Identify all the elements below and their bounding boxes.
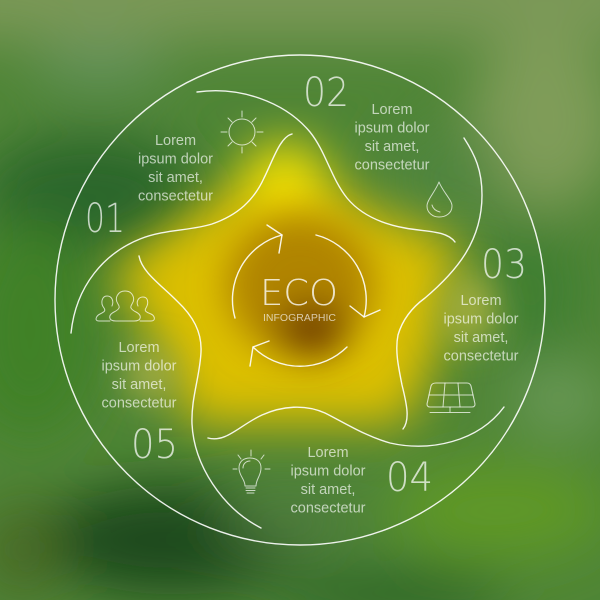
number 05: 05 xyxy=(131,422,178,468)
text block 2: ipsum dolor xyxy=(355,120,430,136)
text block 4: sit amet, xyxy=(301,482,355,498)
text block 3: sit amet, xyxy=(454,330,508,346)
text block 2: Lorem xyxy=(371,102,413,118)
title: ECO: ECO xyxy=(260,273,338,314)
text block 3: ipsum dolor xyxy=(444,312,519,328)
icon: solar panel xyxy=(427,383,475,412)
text block 4: Lorem xyxy=(307,445,349,461)
petal curve 4 xyxy=(208,407,504,446)
central cycle arrows xyxy=(232,225,380,366)
text block 4: ipsum dolor xyxy=(291,464,366,480)
text block 1: sit amet, xyxy=(148,170,203,186)
text block 2: consectetur xyxy=(355,158,430,174)
number 02: 02 xyxy=(303,70,349,116)
icon: light bulb xyxy=(233,450,270,493)
subtitle: INFOGRAPHIC: INFOGRAPHIC xyxy=(263,312,336,324)
petal curve 1 xyxy=(197,91,455,242)
text block 3: consectetur xyxy=(444,348,519,364)
petal curve 3 xyxy=(139,256,261,528)
petal curve 5 xyxy=(397,138,482,429)
text block 5: Lorem xyxy=(118,340,160,356)
text block 5: consectetur xyxy=(102,396,177,412)
text block 1: consectetur xyxy=(138,188,213,204)
icon: people xyxy=(96,291,154,321)
icon: water drop xyxy=(427,182,452,217)
text block 1: Lorem xyxy=(155,133,196,149)
text block 5: ipsum dolor xyxy=(102,358,177,374)
text block 3: Lorem xyxy=(460,293,502,309)
text block 2: sit amet, xyxy=(365,139,419,155)
number 01: 01 xyxy=(85,196,125,242)
text block 4: consectetur xyxy=(291,500,366,516)
text block 1: ipsum dolor xyxy=(138,152,213,168)
outer circle xyxy=(55,55,545,545)
icon: sun xyxy=(221,111,263,153)
number 04: 04 xyxy=(386,455,433,501)
number 03: 03 xyxy=(481,242,527,288)
petal curve 2 xyxy=(71,134,292,333)
text block 5: sit amet, xyxy=(112,377,166,393)
